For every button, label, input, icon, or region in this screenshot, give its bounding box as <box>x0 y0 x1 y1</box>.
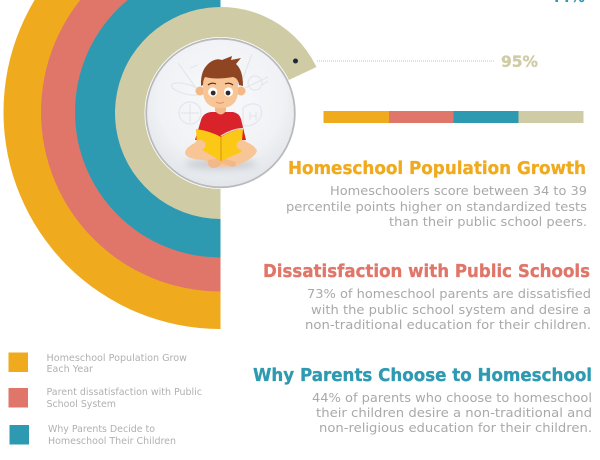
face <box>203 76 238 108</box>
ring: 95 percent arc <box>115 7 317 219</box>
circle background <box>144 37 296 189</box>
hair <box>201 56 243 86</box>
legend item: why parents decide <box>10 424 176 447</box>
heading: Homeschool Population Growth <box>288 159 586 179</box>
red shirt <box>195 112 246 140</box>
body text: Homeschoolers score between 34 to 39 <box>330 183 587 198</box>
ears <box>196 86 204 96</box>
body text <box>286 183 587 229</box>
body text: than their public school peers. <box>389 214 587 229</box>
body text <box>305 286 591 332</box>
body text: percentile points higher on standardized tests <box>286 199 587 214</box>
body text: 73% of homeschool parents are dissatisfied <box>307 286 591 301</box>
hands <box>194 140 206 150</box>
ring: homeschool population growth <box>3 0 220 329</box>
legs <box>185 139 257 167</box>
legend item: population growth: Each Year <box>46 364 93 375</box>
neck <box>215 104 226 114</box>
value: 95 percent: 95% <box>501 52 538 71</box>
section: homeschool population growth <box>286 159 587 229</box>
legend item: population growth: Homeschool Population Grow <box>46 353 187 364</box>
leader line to 95 percent <box>317 60 495 62</box>
body text <box>312 390 592 435</box>
body text: 44% of parents who choose to homeschool <box>312 390 592 405</box>
legend item: parent dissatisfaction <box>8 387 202 410</box>
legend item: parent dissatisfaction: Parent dissatisfaction with Public <box>46 387 202 398</box>
section: why parents choose to homeschool <box>253 366 592 435</box>
legend item: why parents decide: Homeschool Their Children <box>48 436 176 447</box>
chart: concentric half-ring chart <box>3 0 316 329</box>
background doodles <box>170 54 268 126</box>
legend item: why parents decide: Why Parents Decide to <box>48 424 155 435</box>
mouth <box>216 102 224 103</box>
floor shadow <box>185 158 257 170</box>
open yellow book <box>196 129 243 161</box>
heading: Why Parents Choose to Homeschool <box>253 366 592 386</box>
body text: with the public school system and desire a <box>311 302 591 317</box>
stacked colour bar <box>324 111 584 123</box>
body text: non-religious education for their children. <box>319 420 592 435</box>
body text: their children desire a non-traditional and <box>316 405 592 420</box>
marker dot on arc <box>293 58 298 64</box>
heading: Dissatisfaction with Public Schools <box>263 262 590 282</box>
legend <box>8 352 202 447</box>
ring: parent dissatisfaction <box>41 0 221 292</box>
section: dissatisfaction with public schools <box>263 262 591 332</box>
eyes <box>208 83 233 97</box>
ring: why parents decide <box>75 0 221 258</box>
legend item: parent dissatisfaction: School System <box>46 399 116 410</box>
icon: boy reading a book in circle <box>144 37 296 189</box>
legend item: population growth <box>8 352 187 375</box>
body text: non-traditional education for their children. <box>305 317 591 332</box>
